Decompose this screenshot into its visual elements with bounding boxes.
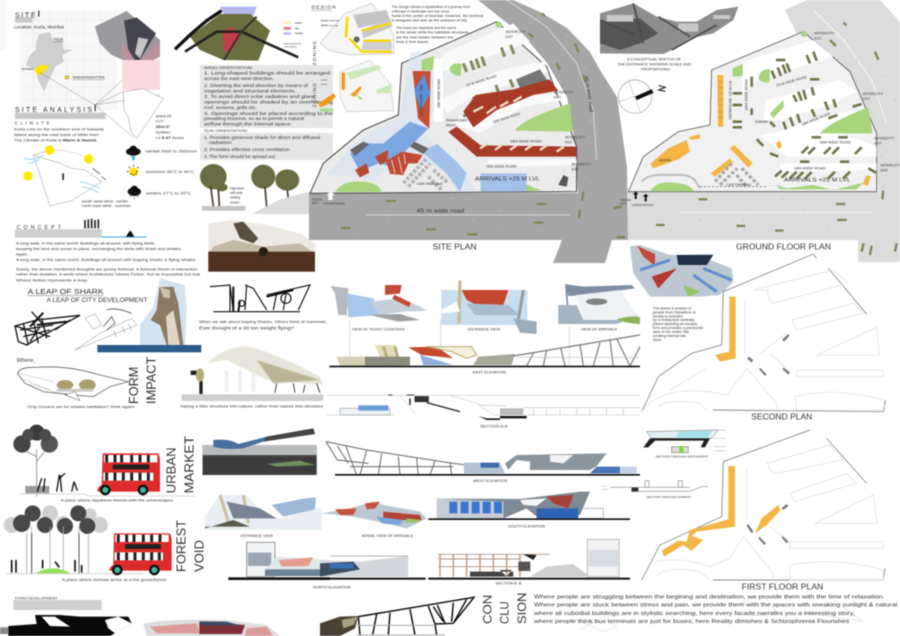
tree caption: shading [230, 196, 240, 200]
panel: site plan [310, 0, 597, 252]
gray block [516, 69, 549, 93]
aerial view label: AERIAL VIEW OF ARRIVALS [361, 534, 414, 538]
site boundary [310, 22, 577, 193]
plan labels: INTERCITY [554, 91, 575, 95]
green areas [335, 22, 573, 192]
tree caption: with wide [230, 191, 243, 195]
section through restaurant [643, 430, 726, 453]
plan labels: 18M WIDE ROAD [492, 112, 521, 124]
site plan roads [309, 0, 628, 263]
red roof: departure [413, 71, 431, 129]
wind text: across the east west direction. [204, 76, 274, 81]
heading: site analysis [15, 105, 106, 119]
roof teeth [473, 97, 564, 152]
building elevation sketch [210, 285, 310, 312]
title: first floor plan: FIRST FLOOR PLAN [742, 582, 823, 592]
conclusion text [533, 594, 897, 625]
winter text: winters 17°C to 20°C [146, 190, 191, 195]
leader lines [350, 320, 569, 367]
sun text [204, 128, 321, 159]
restaurant text: view of the entire Site [653, 330, 690, 334]
site boundary [628, 32, 877, 192]
plot area text: 26041.57 [156, 124, 170, 129]
plan labels: 24 M WIDE ROAD [466, 74, 498, 88]
vertical label: clu: CLU [498, 601, 512, 624]
conclusion text: where all cubodial buildings are in stylistic searching, here every facade narrates you a interesting story, [533, 611, 855, 617]
south elevation [428, 492, 630, 520]
vertical label: con: CON [480, 595, 494, 624]
map of India: MUMBAI [21, 67, 34, 71]
road bus markers [613, 23, 897, 255]
section restaurant label: SECTION THROUGH RESTAURANT [656, 455, 709, 459]
design concept text: Kurla is the center of Mumbai. However, the terminal [392, 14, 484, 18]
sketch caption: THE ENTRANCE SHOWING SCALE AND [617, 62, 692, 66]
wind caption: south west wind - winter [82, 199, 129, 203]
view label: ticket counters: VIEW OF TICKET COUNTERS [352, 328, 406, 332]
concept text: A long walk, in the same world. Buildings all around, with flying birds, [16, 242, 155, 246]
bus bays [733, 52, 876, 179]
icon: sun [127, 165, 140, 177]
conceptual entrance sketch [600, 3, 738, 113]
faint sketch behind conclusion [577, 595, 863, 632]
urban tree [13, 425, 58, 497]
summer text: summers 36°C to 40°C [146, 169, 194, 174]
label: zoning faint: ZONING [312, 82, 318, 107]
plan labels: EXIT [863, 97, 871, 101]
site aerial with roads [175, 7, 298, 61]
east elevation [329, 335, 640, 367]
plot area text: Sq.Meters [156, 130, 170, 135]
fan roof [386, 152, 423, 175]
wind text: openings should be shaded by an overhanging [204, 100, 334, 104]
map of India [21, 33, 105, 91]
design concept text: trees & their leaves. [396, 40, 429, 44]
blue glazed concourse [350, 122, 428, 172]
large label: arrivals: ARRIVALS +25 M LVL [784, 178, 851, 184]
white roads [742, 40, 877, 172]
connector lines [38, 72, 160, 137]
plan labels: INTERCITY [881, 164, 900, 168]
plan labels: 18M WIDE ROAD [510, 139, 542, 143]
plan labels: EXIT [554, 96, 562, 100]
plot area text: PLOT : [156, 118, 165, 123]
design concept text: softscape to hardscape and vice versa. [392, 9, 450, 13]
plan labels: CAR PARKING [417, 182, 443, 186]
icon: winter cloud [128, 186, 141, 198]
structure caption: Taking a little structure into nature, rather than nature into structure [180, 404, 323, 408]
west elevation [326, 442, 640, 476]
ground floor plan roads [628, 0, 900, 262]
plan labels: ENT [881, 169, 889, 173]
tree caption: High trees [230, 186, 244, 190]
site aerial legend [283, 21, 303, 49]
first plan outline [642, 430, 885, 580]
urban people [37, 473, 77, 492]
title: ground floor plan: GROUND FLOOR PLAN [736, 242, 831, 252]
forest caption: A place where Arrivals arrive at a the grove/forest [62, 578, 166, 582]
section subway label: SECTION THROUGH SUBWAY [646, 495, 691, 499]
design concept text: The Design follows a equalisation of a journey from [392, 5, 470, 9]
concept text: keeping the land and ocean in place, exchanging the birds with shark and whales. [16, 247, 182, 251]
plan labels: ENT [565, 140, 573, 144]
heading: site: SITE [15, 12, 37, 19]
title: second plan: SECOND PLAN [751, 411, 812, 421]
mammal caption [199, 320, 327, 331]
panel: second floor plan [630, 245, 886, 421]
plan labels: CAR ENTRANCE [323, 202, 345, 206]
car bays [463, 45, 514, 117]
whale illustration [17, 367, 128, 401]
sun text: SUN ORIENTATION: [204, 128, 248, 133]
view label: entrance: ENTRANCE VIEW [468, 328, 501, 332]
parked cars [403, 158, 448, 190]
plan labels: INTERCITY [506, 30, 526, 34]
curved road name: 45 m wide road [584, 75, 594, 113]
heading: a leap of shark [28, 287, 147, 304]
concept text: Again, [16, 252, 28, 256]
plan labels: INTERCITY [814, 32, 835, 36]
urban caption: A place where departure blends with the urbanscapes [61, 498, 174, 502]
zoning plan 1: VEHICULAR [329, 24, 339, 27]
wind caption: north east wind - summer [82, 204, 132, 208]
aerial site photo [95, 11, 160, 90]
orange restaurant block [715, 297, 736, 362]
trees illustration [200, 164, 310, 214]
concept text: Surely, the above mentioned thoughts are purely fictional. A fictional World of interaction [16, 267, 198, 271]
location text: Location: Kurla, Mumbai [14, 25, 64, 30]
red roof: upper wing [463, 79, 558, 127]
plan labels: ENT [621, 202, 627, 206]
white roads [440, 23, 577, 167]
wind text: 1. Long-shaped buildings should be arranged [204, 70, 331, 76]
sun text: 1. Provides generous shade for direct and diffused [204, 135, 321, 140]
form development heading [13, 597, 102, 610]
concept text: rather than isolation. A world where Architecture follows Fiction. Not as impossible but real [16, 273, 200, 277]
panel: site context [0, 0, 303, 208]
restaurant text: placed depicting an escapic [653, 322, 698, 326]
plan labels: INTERCITY [572, 162, 592, 166]
wind text: airflow through the internal space. [204, 122, 292, 126]
entrance arrows [633, 191, 648, 201]
heading: design: DESIGN [312, 4, 337, 10]
design concept text: is the whale while the habitable structures [396, 31, 469, 35]
heading: site [15, 11, 39, 23]
blue building shadows [327, 50, 477, 192]
plan labels: 18M WIDE ROAD [745, 78, 749, 111]
plot area text [156, 113, 184, 140]
plan labels: REST [446, 123, 457, 127]
plan labels: INTERCITY [863, 92, 884, 96]
whale flying photo [208, 220, 315, 272]
north elevation label: NORTH ELEVATION [313, 585, 351, 589]
zoning plan 2 [318, 60, 394, 112]
plan labels: 18M WIDE ROAD [486, 165, 517, 169]
ground line [20, 494, 195, 496]
design concept text: The buses are elephants and the roof is [396, 26, 456, 30]
wind text: prevailing breezes, so as to permit a natural [204, 116, 304, 121]
vertical label: forest: FOREST [174, 520, 188, 572]
render: north elevation [228, 542, 330, 580]
panel: urban and forest scenes [0, 425, 330, 636]
small red roofs [355, 150, 388, 177]
restaurant text: creating internal site [653, 334, 686, 338]
heading: a leap of shark: A LEAP OF SHARK [28, 287, 105, 296]
tree caption: crown. [230, 200, 240, 204]
plan labels: EXIT [506, 35, 514, 39]
red bus: departure [97, 453, 160, 495]
climate text [14, 120, 104, 143]
render: ticket counters [331, 285, 427, 322]
form development heading: FORM DEVELOPMENT [15, 597, 59, 601]
plan labels: INTERCITY [565, 135, 586, 139]
section B-B [428, 539, 630, 580]
restaurant text: views. [653, 338, 662, 342]
text: where: Where, [17, 358, 35, 364]
structure sketch [15, 312, 80, 345]
plan labels: 18M WIDE ROAD [819, 140, 852, 144]
climate text: island along the east bank of Mithi river. [14, 133, 100, 137]
plot area text: i.e 6.47 Acres [156, 135, 184, 140]
vertical label: urban: URBAN [164, 447, 178, 493]
plan labels: DEPARTURE +9M [419, 85, 423, 117]
zoning plan 1 [320, 3, 394, 55]
restaurant perspective [630, 245, 733, 297]
map of India: INDIA [53, 38, 64, 42]
panel: views and elevations [327, 281, 640, 429]
wind text [204, 65, 334, 126]
conclusion text: Where people are struggling between the begining and destination, we provide them with the time of relaxation. [534, 594, 885, 600]
icon: rain cloud [126, 146, 141, 162]
site aerial legend: CONFLUENCE [283, 47, 297, 49]
plan labels [621, 32, 900, 207]
rainfall text: rainfall 2000 to 2500mm [145, 148, 198, 153]
plan labels: DEPARTURE +25 M LVL [728, 80, 732, 119]
wind trees section [182, 347, 323, 401]
concept text: A long walk, in the same world. Buildings all around with leaping sharks & flying whales. [16, 258, 197, 262]
aerial view of arrivals [322, 502, 427, 528]
plan labels [312, 30, 592, 206]
subway blocks [747, 504, 788, 545]
section B-B label: SECTION B -B [496, 582, 523, 586]
sun text: radiation. [209, 140, 233, 145]
plan labels: PEDESTRIAN [621, 198, 631, 202]
mammal caption: When we talk about leaping Sharks, Others think of mammals, [199, 320, 327, 324]
form development strip [0, 615, 280, 636]
plan labels: EXIT [814, 37, 822, 41]
wind text: 4. Openings should be placed according to the [204, 111, 334, 116]
plan labels: SUBWAY [755, 120, 769, 124]
sun text: 2. Provides effective cross ventilation. [204, 147, 291, 152]
plan labels: 18M WIDE ROAD [437, 78, 441, 108]
view label: arrivals: VIEW OF ARRIVALS [581, 328, 618, 332]
red bus: arrival [109, 533, 172, 575]
plan labels: ENT [312, 201, 318, 205]
plan labels: PANAROMIC [446, 118, 468, 122]
first plan linework [655, 445, 883, 580]
vertical label: market: MARKET [182, 436, 196, 493]
climate text: The Climate of Kurla is Warm & Humid. [14, 139, 97, 143]
green areas [650, 31, 873, 191]
east elevation label: EAST ELEVATION [473, 370, 507, 374]
faint city map [0, 0, 117, 110]
plan labels: 18M WIDE ROAD [801, 112, 831, 127]
zoning plan 1: PEDESTRIAN [329, 20, 340, 23]
orange arrival blocks [730, 145, 753, 168]
heading: concept [15, 219, 147, 238]
render: market perspective [203, 428, 317, 475]
panel: wind and sun orientation [200, 65, 334, 160]
restaurant text: The stress & tension of [653, 307, 691, 311]
panel: concept [15, 219, 327, 409]
road centre lines [366, 0, 597, 215]
plot outline [123, 89, 163, 139]
red roof: lower wing [448, 127, 577, 157]
entrance view label: ENTRANCE VIEW [241, 534, 273, 538]
orange admin block [650, 140, 690, 168]
sketch caption: PROPORTIONS [641, 67, 671, 71]
wind text: roof, screens, grills etc. [204, 105, 257, 110]
plot area text: AREA OF [156, 113, 172, 118]
north elevation [320, 556, 426, 580]
restaurant text [653, 307, 704, 342]
design concept text: are the nest hidden between the [396, 35, 453, 39]
restaurant text: by a restaurant centrally [653, 318, 695, 322]
vertical label: void: VOID [192, 540, 206, 572]
heading: concept: CONCEPT [17, 225, 63, 231]
wind text: 3. To avoid direct solar radiation and glare, [204, 94, 316, 99]
conclusion text: where people think bus terminals are just for buses, here Reality dimishes & Schizophrenia Flourishes [533, 619, 849, 625]
second plan linework [642, 270, 885, 412]
sketch caption: A CONCEPTUAL SKETCH OF [627, 57, 681, 61]
forest of trees [4, 505, 143, 574]
tree caption [230, 186, 244, 204]
section A-A [327, 395, 640, 420]
render: entrance view [205, 495, 322, 530]
shark photo [97, 278, 201, 352]
second plan outline [642, 254, 886, 412]
parked cars [715, 162, 758, 187]
map of India: MAHARASHTRA [73, 76, 105, 80]
site aerial legend: PLAN SHOWING SITE [283, 43, 302, 46]
south elevation label: SOUTH ELEVATION [508, 525, 546, 529]
wind text: vegetation and structural elements. [204, 88, 296, 94]
render: arrivals view [558, 284, 640, 324]
orange departure block [717, 75, 723, 127]
concept text: Where fiction represents a leap. [16, 279, 89, 283]
plan labels: ADMIN [659, 159, 672, 163]
restaurant text: Arrivals is controlled [653, 314, 683, 318]
plan labels: 24 M WIDE ROAD [776, 75, 808, 88]
panel: design and zoning [312, 3, 484, 112]
heading: a leap of shark: A LEAP OF CITY DEVELOPMENT [47, 297, 147, 304]
climate text: Kurla Lies on the southern end of Salsette [14, 128, 104, 132]
render: entrance view [441, 281, 537, 334]
vertical label: sion: SION [515, 593, 529, 624]
sun text: 3. The form should be spread out. [204, 154, 276, 159]
icon: north compass [618, 80, 665, 113]
panel: first floor plan and sections [480, 430, 897, 632]
heading: site analysis: SITE ANALYSIS [15, 107, 92, 114]
wind text: WIND ORIENTATION: [204, 65, 253, 70]
climate text: CLIMATE [15, 120, 49, 125]
panel: ground floor plan [613, 10, 900, 255]
section label: SECTION A-A [480, 425, 509, 429]
road centre lines [680, 10, 887, 212]
design concept text [392, 5, 484, 44]
form development finale [320, 597, 474, 636]
orange first floor blocks [662, 466, 735, 557]
wind text: 2. Diverting the wind direction by means of [204, 83, 309, 88]
wind caption [82, 199, 132, 208]
plan labels: 18M WIDE ROAD [794, 166, 826, 170]
restaurant text: people from Departure to [653, 310, 696, 314]
west elevation label: WEST ELEVATION [473, 479, 508, 483]
road bus markers [341, 13, 585, 234]
plan labels: PEDESTRIAN [312, 197, 322, 201]
plan labels: CAR PARKING [726, 183, 752, 187]
concept text [16, 242, 200, 283]
whale caption: Only Oceans are for whales habitation? think again! [27, 405, 135, 409]
section through subway [602, 481, 708, 492]
conclusion text: Where people are stuck between stress and pain, we provide them with the spaces with sneaking sunlight & natural [534, 603, 897, 609]
sun path diagram [23, 145, 106, 206]
plan labels: EXIT [874, 141, 882, 145]
vertical label: form: FORM [127, 367, 141, 404]
restaurant text: form and provides a panaromic [653, 326, 704, 330]
sketch caption [617, 57, 692, 71]
subway blocks [747, 334, 790, 376]
mammal caption: Ever thought of a 30 ton weight flying? [199, 326, 295, 331]
panel: lower elevations [313, 442, 640, 636]
label: zoning: ZONING [312, 40, 318, 65]
plan labels: CAR ENTRANCE [632, 203, 654, 207]
plan labels: ENT [572, 167, 580, 171]
large label: arrivals: ARRIVALS +25 M LVL [475, 177, 540, 183]
design concept text: is designed and acts as the entrance of city. [392, 19, 468, 23]
plan sketch [75, 309, 137, 350]
road name: 45 m wide road [417, 208, 464, 214]
plan labels: INTERCITY [874, 136, 895, 140]
vertical label: impact: IMPACT [144, 356, 158, 404]
title: site plan: SITE PLAN [433, 242, 477, 252]
